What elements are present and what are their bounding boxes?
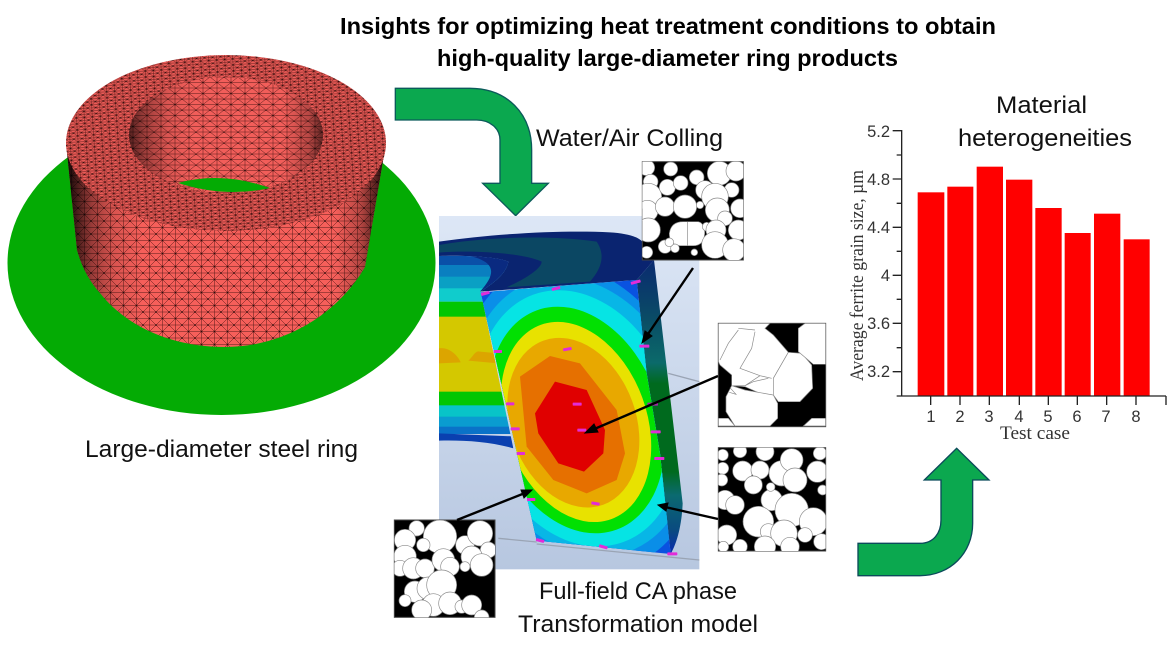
- phase model caption: Transformation model: [518, 611, 758, 638]
- x tick labels: 5: [1043, 408, 1053, 426]
- ring caption: Large-diameter steel ring: [85, 436, 358, 463]
- section side face: [637, 260, 683, 554]
- x tick labels: 3: [984, 408, 994, 426]
- micrograph: left surface: [392, 520, 496, 625]
- x axis title: Test case: [1000, 424, 1070, 444]
- results heading: [958, 92, 1132, 152]
- arrow: left micrograph pointer: [457, 490, 532, 520]
- panel background: [439, 216, 699, 569]
- micrograph: right surface: [718, 447, 826, 552]
- arrow: ring to phase model: [395, 88, 548, 216]
- arrow: right micrograph pointer: [658, 503, 718, 519]
- x tick labels: 7: [1101, 408, 1111, 426]
- title: high-quality large-diameter ring products: [437, 45, 898, 71]
- y tick labels: 5.2: [867, 123, 890, 141]
- bar chart: ferrite grain size: [848, 123, 1166, 444]
- y tick labels: 4.4: [867, 219, 890, 237]
- back top surface: [439, 232, 654, 292]
- sensor markers: [481, 279, 677, 555]
- cooling label: Water/Air Colling: [536, 125, 723, 152]
- dark inner lip: [470, 256, 510, 292]
- phase model caption: Full-field CA phase: [539, 578, 737, 605]
- micrograph: core: [718, 323, 826, 427]
- steel ring mesh model: [8, 55, 436, 415]
- green disc seen through hole: [178, 178, 270, 192]
- y tick labels: [867, 123, 890, 381]
- phase model caption: [518, 578, 758, 638]
- contour panel: temperature field: [439, 216, 700, 570]
- bars: [918, 167, 1150, 396]
- y tick labels: 4: [881, 267, 890, 285]
- title: Insights for optimizing heat treatment conditions to obtain: [340, 13, 996, 39]
- hole wall bands: [439, 256, 514, 448]
- results heading: Material: [996, 92, 1087, 119]
- y tick labels: 3.2: [867, 363, 890, 381]
- plate reference lines: [498, 373, 699, 560]
- arrow: top micrograph pointer: [642, 268, 693, 343]
- section contours: [480, 280, 670, 554]
- ring outer wall: [66, 143, 386, 347]
- green base disc: [8, 111, 436, 415]
- title: [340, 13, 996, 71]
- arrow: core micrograph pointer: [585, 376, 718, 433]
- x tick labels: 1: [926, 408, 936, 426]
- x tick labels: [926, 408, 1141, 426]
- results heading: heterogeneities: [958, 125, 1132, 152]
- y tick labels: 3.6: [867, 315, 890, 333]
- y tick labels: 4.8: [867, 171, 890, 189]
- x tick labels: 2: [955, 408, 965, 426]
- arrow: phase model to results: [858, 448, 989, 576]
- ring top face: [66, 55, 386, 231]
- axes and ticks: [893, 130, 1166, 405]
- x tick labels: 6: [1072, 408, 1082, 426]
- y axis title: Average ferrite grain size, µm: [848, 169, 868, 381]
- micrograph: top surface: [642, 161, 744, 260]
- ring inner hole: [129, 77, 323, 193]
- x tick labels: 8: [1131, 408, 1141, 426]
- x tick labels: 4: [1014, 408, 1024, 426]
